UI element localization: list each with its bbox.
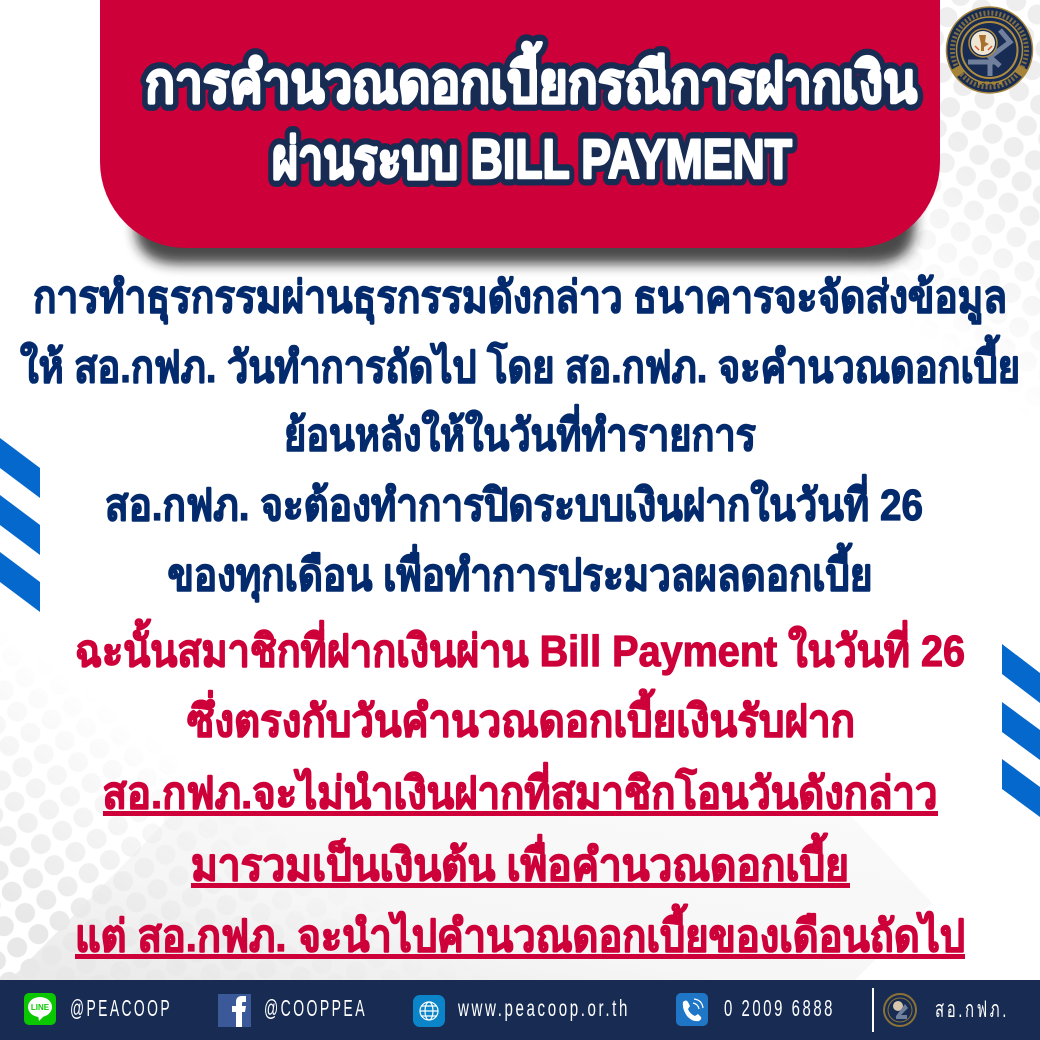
body text: navy paragraph xyxy=(20,273,1020,603)
logo: cooperative seal xyxy=(946,7,1032,93)
icon: small seal xyxy=(884,994,916,1026)
footer bar xyxy=(0,980,1040,1040)
title: ผ่านระบบ BILL PAYMENT xyxy=(272,127,792,190)
divider xyxy=(872,988,874,1032)
body text: navy paragraph: ย้อนหลังให้ในวันที่ทำรายการ xyxy=(284,404,756,460)
label: line account: @PEACOOP xyxy=(70,995,172,1021)
icon: LINE xyxy=(24,993,56,1025)
body text: red paragraph: ซึ่งตรงกับวันคำนวณดอกเบี้ยเงินรับฝาก xyxy=(187,688,855,746)
title xyxy=(145,42,917,190)
header banner xyxy=(100,0,940,264)
stripes: left chevrons xyxy=(0,438,40,612)
body text: red paragraph: ฉะนั้นสมาชิกที่ฝากเงินผ่าน Bill Payment ในวันที่ 26 xyxy=(75,618,965,676)
title: การคำนวณดอกเบี้ยกรณีการฝากเงิน xyxy=(145,42,917,114)
title: ผ่านระบบ BILL PAYMENT xyxy=(272,127,792,190)
body text: navy paragraph: ของทุกเดือน เพื่อทำการประมวลผลดอกเบี้ย xyxy=(168,542,872,603)
body text: red paragraph: แต่ สอ.กฟภ. จะนำไปคำนวณดอกเบี้ยของเดือนถัดไป xyxy=(75,903,965,961)
icon: LINE: LINE xyxy=(31,1003,50,1012)
icon: phone xyxy=(676,993,708,1026)
label: phone number: 0 2009 6888 xyxy=(724,995,835,1021)
body text: red paragraph: สอ.กฟภ.จะไม่นำเงินฝากที่สมาชิกโอนวันดังกล่าว xyxy=(102,762,938,818)
label: facebook account: @COOPPEA xyxy=(264,995,367,1021)
label: website: www.peacoop.or.th xyxy=(457,995,630,1021)
body text: red paragraph xyxy=(75,618,965,961)
title: การคำนวณดอกเบี้ยกรณีการฝากเงิน xyxy=(145,42,917,114)
stripes: right chevrons xyxy=(1002,644,1040,817)
body text: red paragraph: มารวมเป็นเงินต้น เพื่อคำนวณดอกเบี้ย xyxy=(191,832,849,890)
icon: website globe xyxy=(413,995,445,1027)
icon: Facebook xyxy=(218,994,251,1027)
body text: navy paragraph: สอ.กฟภ. จะต้องทำการปิดระบบเงินฝากในวันที่ 26 xyxy=(105,474,923,530)
